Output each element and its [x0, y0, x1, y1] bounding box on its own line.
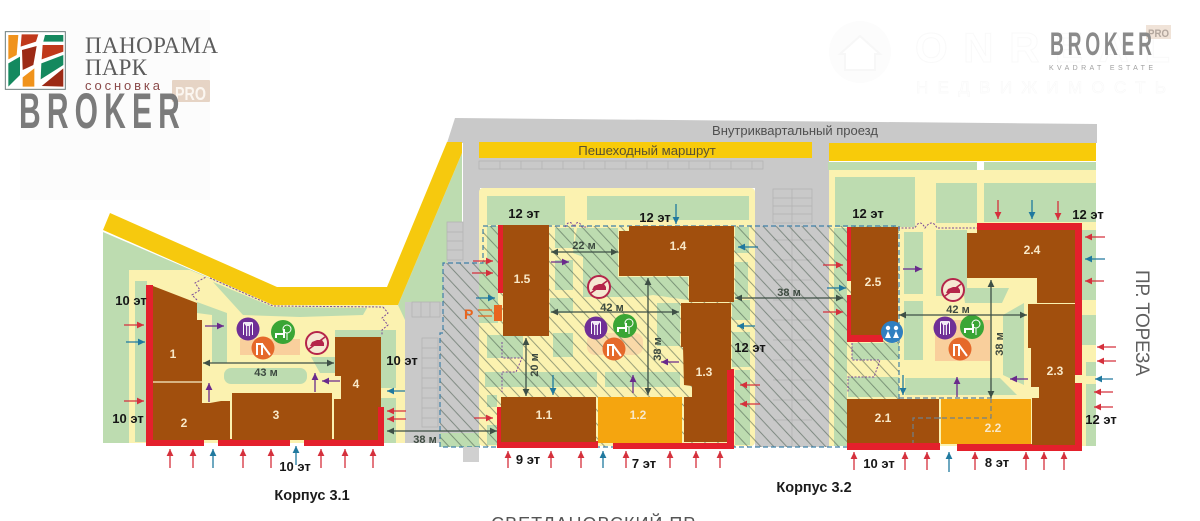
gray dashed route over buildings: [913, 398, 991, 443]
dimension arrows and distances: 42 м: [946, 304, 970, 316]
building 1.3: 1.3: [696, 365, 713, 379]
arrows: blue entrances: [126, 200, 1113, 472]
street label: Toreza: ПР. ТОРЕЗА: [1131, 270, 1152, 376]
courtyard corpus 2: cream paths: [829, 170, 1096, 446]
building 2.4: 2.4: [1024, 243, 1041, 257]
logo: Broker Kvadrat Estate top right: [1049, 25, 1171, 72]
gray dashed route line: [899, 398, 991, 443]
dimension arrows and distances: 43 м: [254, 367, 278, 379]
floor labels: corpus 3.1: 10 эт: [386, 353, 418, 368]
floor labels: corpus 2: 12 эт: [1072, 207, 1104, 222]
icon: kindergarten: [881, 321, 903, 343]
building 2.3: [1028, 304, 1075, 445]
logo: Панорама Парк text: ПАНОРАМА: [85, 33, 218, 58]
building 1.4: 1.4: [670, 239, 687, 253]
road label: inner passage: Внутриквартальный проезд: [712, 123, 878, 138]
watermark: ONREAL: НЕДВИЖИМОСТЬ: [916, 78, 1166, 97]
building 2.1: 2.1: [875, 411, 892, 425]
logo: Панорама Парк text: сосновка: [85, 78, 161, 93]
building 2.3: 2.3: [1047, 364, 1064, 378]
floor labels: corpus 1: [508, 206, 766, 471]
building 2.2: 2.2: [985, 421, 1002, 435]
logo backing panel: [20, 10, 210, 200]
floor labels: corpus 3.1: 10 эт: [279, 459, 311, 474]
building 2.2: [941, 399, 1031, 444]
parking grids: [412, 161, 812, 446]
building 2.1: [847, 399, 939, 443]
logo: Панорама Парк icon: [5, 32, 65, 89]
courtyard corpus 2: lawns: [828, 162, 1096, 446]
building 4: [334, 337, 381, 440]
pedestrian route: diagonal yellow band: [103, 142, 462, 305]
building 1.2: [598, 397, 682, 443]
corpus 2: red noise facades: [847, 223, 1082, 451]
building 1.1: [501, 397, 596, 442]
courtyard corpus 1: play area: [587, 333, 643, 355]
logo: Broker Kvadrat Estate top right: PRO: [1148, 28, 1169, 40]
fences: purple dotted lines: [192, 222, 977, 392]
floor labels: corpus 1: 12 эт: [734, 340, 766, 355]
floor labels: corpus 2: 10 эт: [863, 456, 895, 471]
logo: Broker Kvadrat Estate top right: BROKER: [1050, 26, 1152, 62]
road: left parking: [405, 222, 480, 443]
building 1.4: [619, 226, 734, 302]
courtyard 3.1: lawns and play area: [135, 281, 396, 443]
logo: Broker Kvadrat Estate top right: KVADRAT ESTATE: [1049, 65, 1153, 72]
watermark: ONREAL: [829, 21, 1170, 97]
building 2.5: 2.5: [865, 275, 882, 289]
building 1.5: 1.5: [514, 272, 531, 286]
floor labels: corpus 2: 8 эт: [985, 455, 1009, 470]
courtyard corpus 1: cream paths: [479, 188, 755, 446]
courtyard corpus 1: lawns: [479, 196, 750, 445]
dimension arrows and distances: 22 м: [572, 240, 596, 252]
arrows: red residents entrances: [124, 200, 1116, 470]
no-traffic hatched zone: [440, 226, 899, 447]
logo: Панорама Парк text: [85, 33, 218, 93]
floor labels: corpus 2: [852, 206, 1117, 471]
building 1.1: 1.1: [536, 408, 553, 422]
building 4: 4: [353, 377, 360, 391]
label: Корпус 3.2: Корпус 3.2: [776, 480, 852, 496]
floor labels: corpus 1: 12 эт: [639, 210, 671, 225]
road: inner block passage: [447, 118, 1097, 263]
amenities icons: corpus 1: [584, 276, 637, 360]
logo: Broker Pro: BROKER: [19, 83, 180, 139]
watermark: ONREAL: ONREAL: [915, 24, 1170, 71]
floor labels: corpus 2: 12 эт: [852, 206, 884, 221]
arrows: purple courtyard entrances: [205, 262, 1028, 402]
floor labels: corpus 1: 9 эт: [516, 452, 540, 467]
dimension arrows and distances: 38 м: [777, 287, 801, 299]
corpus 3.1: red noise facades: [146, 285, 384, 446]
logo: Панорама Парк text: ПАРК: [85, 55, 148, 80]
building 1 and 2: 2: [181, 416, 188, 430]
road: central parking: [755, 143, 829, 447]
building 3: [232, 393, 332, 440]
building 1.5: [503, 225, 549, 336]
pedestrian route: top yellow bars: [479, 142, 1096, 161]
parking entrance marker: [464, 305, 502, 322]
building 1.2: 1.2: [630, 408, 647, 422]
corpus 1: red noise facades: [497, 225, 734, 449]
dimension arrows and distances: 42 м: [600, 302, 624, 314]
site plan base: green lawns: [103, 153, 462, 443]
courtyard corpus 2: play area: [935, 320, 990, 361]
gray stub below road: [463, 447, 479, 462]
logo: Broker Pro: PRO: [175, 84, 206, 104]
path label: pedestrian route: Пешеходный маршрут: [578, 143, 716, 158]
floor labels: corpus 1: 7 эт: [632, 456, 656, 471]
building 3: 3: [273, 408, 280, 422]
amenities icons: corpus 3.1: [236, 318, 328, 360]
building 1.3: [681, 303, 731, 442]
building 1 and 2: [153, 286, 230, 440]
dimension arrows and distances: 38 м: [413, 434, 437, 446]
amenities icons: corpus 2: [934, 279, 984, 360]
building 1 and 2: 1: [170, 347, 177, 361]
label: Корпус 3.1: Корпус 3.1: [274, 488, 350, 504]
green under left hatched corner: [440, 433, 480, 447]
floor labels: corpus 3.1: 10 эт: [115, 293, 147, 308]
parking entrance marker: P: [464, 306, 473, 322]
building 2.5: [851, 227, 898, 335]
floor labels: corpus 3.1: 10 эт: [112, 411, 144, 426]
dimension arrows and distances: 38 м: [652, 337, 664, 361]
floor labels: corpus 1: 12 эт: [508, 206, 540, 221]
dimension arrows and distances: 20 м: [529, 353, 541, 377]
dimension arrows and distances: 38 м: [994, 332, 1006, 356]
building 2.4: [967, 230, 1075, 303]
floor labels: corpus 2: 12 эт: [1085, 412, 1117, 427]
floor labels: corpus 3.1: [112, 293, 418, 474]
dimension arrows and distances: [203, 240, 1027, 446]
courtyard 3.1: cream paths: [129, 270, 405, 443]
